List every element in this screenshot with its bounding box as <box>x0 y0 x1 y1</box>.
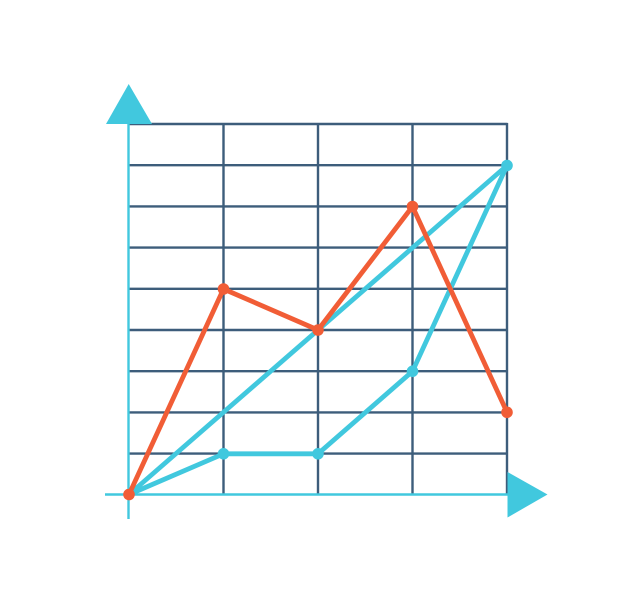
chart grid <box>129 123 508 494</box>
icon: y axis arrow <box>106 84 152 124</box>
x axis <box>105 493 508 496</box>
orange line series <box>123 201 513 500</box>
y axis <box>127 124 130 519</box>
curved blue line series <box>129 166 507 494</box>
icon: x axis arrow <box>508 472 548 518</box>
straight blue line series <box>129 160 513 494</box>
